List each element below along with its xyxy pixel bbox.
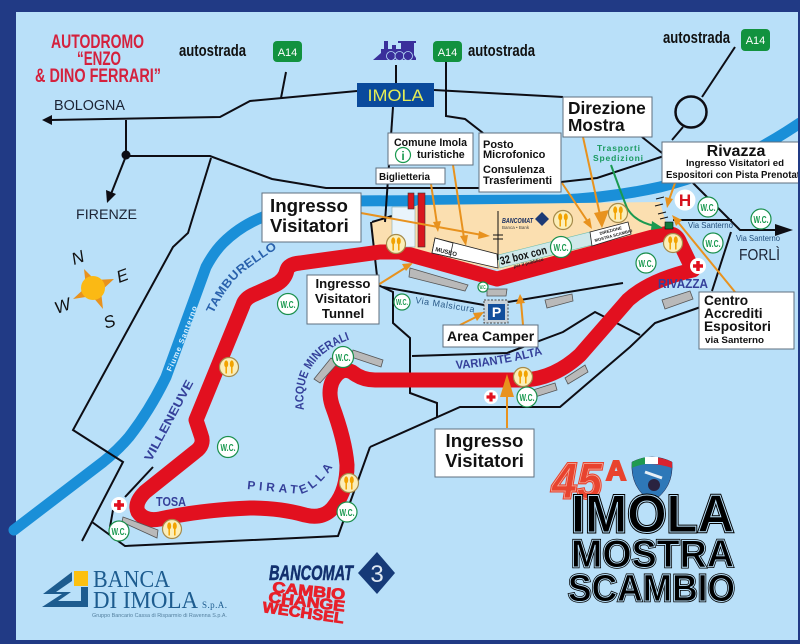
logo: Bancomat: CAMBIO	[272, 579, 346, 604]
logo: Bancomat	[261, 552, 395, 627]
icon: restroom markers: W.C.	[340, 508, 355, 519]
callout: Ingresso Visitatori Tunnel	[307, 275, 379, 324]
callout: Posto Microfonico: Trasferimenti	[483, 175, 552, 187]
callout: Direzione Mostra: Direzione	[568, 98, 646, 118]
badge: A14 right: A14	[746, 35, 765, 47]
badge: A14 centre	[433, 41, 462, 62]
river Santerno	[14, 123, 800, 530]
label: autostrada left: autostrada	[179, 41, 246, 60]
title: Imola Mostra Scambio: SCAMBIO	[568, 568, 735, 610]
entrance gate mark	[493, 211, 503, 260]
32 box strip: per il pubblico	[513, 257, 544, 269]
track label: Variante Alta: VARIANTE ALTA	[456, 348, 542, 369]
title: Imola Mostra Scambio: IMOLA	[571, 485, 734, 544]
callout: Ingresso Visitatori top: Visitatori	[270, 215, 349, 236]
event badge: 45a: A	[606, 455, 626, 486]
icon: first aid markers	[111, 258, 706, 513]
track label: Acque Minerali: ACQUE MINERALI	[295, 332, 349, 410]
label: Via Santerno east: Via Santerno	[688, 220, 733, 230]
badge: A14 right	[741, 29, 770, 51]
orange direction arrows	[361, 137, 735, 428]
icon: restroom markers: W.C.	[280, 300, 296, 311]
callout: Posto Microfonico: Consulenza	[483, 164, 546, 176]
icon: restroom markers: W.C.	[706, 239, 721, 250]
logo: Banca di Imola	[42, 567, 227, 619]
callout: Posto Microfonico	[479, 133, 561, 192]
callout: Ingresso Visitatori Tunnel: Visitatori	[315, 291, 371, 306]
service buildings	[122, 268, 693, 538]
direzione mostra tag: MOSTRA SCAMBIO	[594, 228, 634, 243]
callout: Comune Imola: i	[401, 149, 405, 163]
icon: hospital: H	[679, 191, 691, 210]
callout: Ingresso Visitatori bottom	[435, 429, 534, 477]
green shipping arrow	[611, 165, 673, 230]
title: Imola Mostra Scambio: SCAMBIO	[568, 568, 735, 610]
direzione mostra tag: DIREZIONE	[599, 225, 622, 236]
parking icon: P	[492, 304, 501, 320]
badge: A14 left	[273, 41, 302, 62]
logo: Bancomat: 3	[370, 561, 384, 588]
callout: Comune Imola: Comune Imola	[394, 137, 467, 149]
badge: A14 centre: A14	[438, 47, 457, 59]
icon: restroom markers: W.C.	[396, 298, 408, 307]
icon: restroom markers: W.C.	[112, 527, 127, 538]
callout: Centro Accrediti Espositori: Centro	[704, 293, 748, 308]
logo: Bancomat: WECHSEL	[261, 599, 345, 627]
badge: A14 left: A14	[278, 47, 297, 59]
label: autostrada centre: autostrada	[468, 41, 535, 60]
label: Bologna: BOLOGNA	[54, 98, 125, 114]
label: autodromo: “ENZO	[77, 49, 121, 70]
logo: club shield	[632, 457, 672, 502]
icon: food markers	[162, 204, 682, 538]
icon: restroom markers: W.C.	[554, 243, 569, 254]
title: Imola Mostra Scambio: MOSTRA	[571, 533, 734, 576]
sign: Imola: IMOLA	[368, 86, 424, 105]
icon: restroom markers: W.C.	[480, 285, 487, 291]
callout: Ingresso Visitatori top	[262, 193, 361, 242]
icon: restroom markers: W.C.	[700, 203, 716, 214]
event badge: 45a: 45	[551, 453, 603, 509]
compass rose: N	[69, 246, 88, 269]
callout: Rivazza: Ingresso Visitatori ed	[686, 158, 784, 169]
icon: restroom markers: W.C.	[220, 443, 236, 454]
logo: Bancomat: CHANGE	[268, 589, 346, 615]
callout: Direzione Mostra: Mostra	[568, 115, 625, 135]
museum building	[392, 193, 498, 268]
callout: Ingresso Visitatori Tunnel: Tunnel	[322, 306, 364, 321]
callout: Biglietteria: Biglietteria	[379, 172, 431, 183]
track label: Tosa: TOSA	[156, 494, 186, 509]
track label: Tamburello: TAMBURELLO	[206, 243, 276, 312]
32 box strip: 32 box con	[499, 245, 548, 268]
compass rose: S	[101, 311, 119, 333]
museum building: MUSEO	[435, 247, 458, 258]
callout: Centro Accrediti Espositori: Accrediti	[704, 306, 763, 321]
logo: Banca di Imola: DI IMOLA	[93, 588, 199, 614]
label: autostrada right: autostrada	[663, 28, 730, 47]
callout: Rivazza	[662, 142, 800, 183]
callout: Centro Accrediti Espositori: Espositori	[704, 319, 771, 334]
label: autodromo	[35, 32, 161, 87]
direzione mostra tag	[590, 222, 634, 246]
compass rose: E	[114, 265, 132, 287]
label: Firenze: FIRENZE	[76, 206, 137, 222]
label: Via Malsicura: Via Malsicura	[415, 295, 476, 314]
river label: Fiume Santerno	[166, 306, 196, 372]
parking icon	[484, 300, 508, 323]
title: Imola Mostra Scambio: IMOLA	[571, 485, 734, 544]
callout: Comune Imola: turistiche	[417, 149, 465, 161]
callout: Posto Microfonico: Microfonico	[483, 149, 546, 161]
callout: Ingresso Visitatori top: Ingresso	[270, 195, 348, 216]
track label: Villeneuve: VILLENEUVE	[144, 380, 194, 459]
icon: steam train	[373, 41, 416, 60]
callout: Posto Microfonico: Posto	[483, 139, 514, 151]
title: Imola Mostra Scambio	[568, 485, 735, 610]
road network	[42, 47, 793, 546]
track label: Rivazza: RIVAZZA	[658, 276, 709, 291]
icon: restroom markers	[109, 197, 771, 541]
icon: restroom markers: W.C.	[520, 393, 535, 404]
label: Forli: FORLÌ	[739, 245, 780, 264]
label: autodromo: AUTODROMO	[51, 32, 144, 53]
right frame edge	[798, 0, 800, 644]
32 box strip	[498, 232, 592, 269]
small bancomat sign	[502, 212, 549, 230]
callout: Comune Imola	[388, 133, 473, 165]
event badge: 45a: 45	[551, 453, 603, 509]
callout: Ingresso Visitatori Tunnel: Ingresso	[316, 276, 370, 291]
title: Imola Mostra Scambio: MOSTRA	[571, 533, 734, 576]
callout: Ingresso Visitatori bottom: Ingresso	[446, 430, 523, 451]
logo: Banca di Imola: Gruppo Bancario Cassa di Risparmio di Ravenna S.p.A.	[92, 613, 227, 619]
sign: Imola	[357, 83, 434, 107]
label: autodromo: & DINO FERRARI”	[35, 66, 161, 87]
compass rose: W	[52, 294, 75, 318]
callout: Centro Accrediti Espositori: via Santerno	[705, 335, 764, 346]
track label: Piratella: PIRATELLA	[248, 464, 332, 494]
label: Via Santerno forli: Via Santerno	[736, 233, 780, 243]
callout: Biglietteria	[376, 168, 445, 184]
green label: Trasporti Spedizioni	[593, 143, 643, 163]
logo: Banca di Imola: S.p.A.	[202, 600, 227, 610]
icon: restroom markers: W.C.	[638, 259, 654, 270]
callout: Ingresso Visitatori bottom: Visitatori	[445, 450, 524, 471]
tick marks near Rivazza gate	[655, 197, 668, 219]
icon: hospital	[674, 190, 696, 210]
exhibition ground area	[371, 202, 668, 270]
compass rose	[52, 246, 132, 333]
green label: Trasporti Spedizioni: Trasporti	[597, 143, 640, 153]
icon: restroom markers: W.C.	[754, 215, 769, 226]
icon: restroom markers: W.C.	[336, 353, 351, 364]
red race track	[137, 234, 693, 520]
callout: Area Camper: Area Camper	[447, 328, 535, 344]
callout: Direzione Mostra	[563, 97, 652, 137]
green label: Trasporti Spedizioni: Spedizioni	[593, 153, 643, 163]
small bancomat sign: Banca • Bank	[502, 225, 530, 230]
logo: Banca di Imola: BANCA	[93, 567, 171, 593]
callout: Centro Accrediti Espositori	[699, 292, 794, 349]
callout: Rivazza: Rivazza	[707, 143, 765, 160]
small bancomat sign: BANCOMAT	[502, 218, 534, 225]
callout: Area Camper	[443, 325, 538, 347]
logo: Bancomat: BANCOMAT	[269, 562, 354, 585]
